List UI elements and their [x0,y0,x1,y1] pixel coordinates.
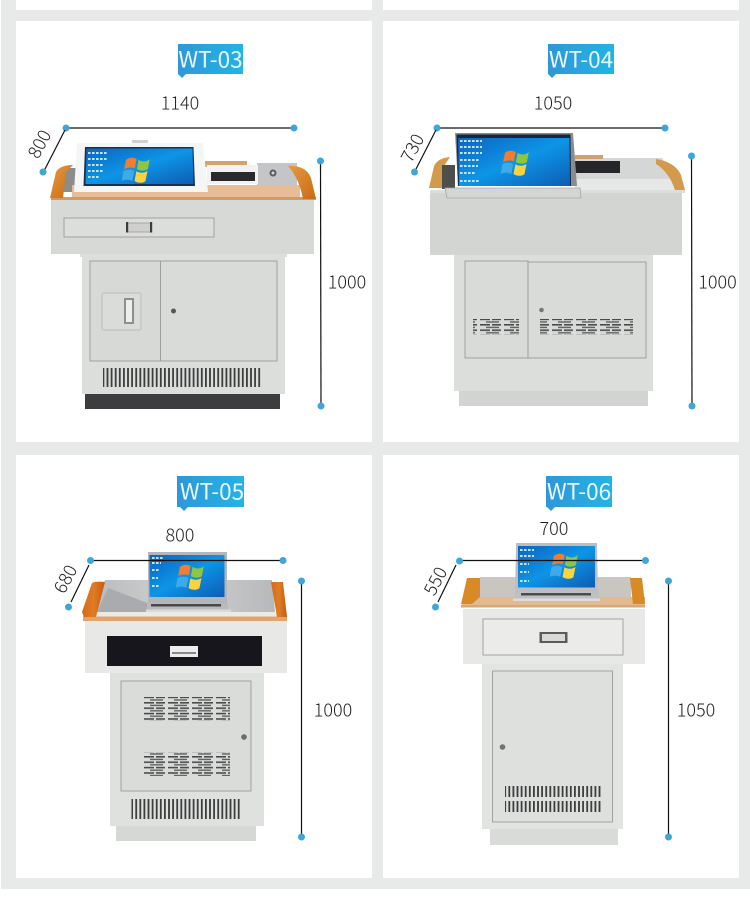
base plinth [85,394,280,409]
dimension: height 1000: 1000 [314,696,352,722]
wooden side rails [461,578,645,604]
dimension: depth 800 [21,125,65,176]
lower cabinet [110,673,264,826]
dimension: width line [87,557,286,564]
desktop surface [575,155,681,190]
badge: WT-05: WT-05 [180,474,244,506]
wooden side rails [429,157,685,190]
base plinth [459,391,648,406]
tray [445,188,581,198]
dimension: height 1050: 1050 [677,696,715,722]
podium WT-03 [50,140,316,409]
podium WT-04 [429,133,685,406]
lower cabinet [80,254,287,394]
dimension: depth 730: 730 [394,129,430,167]
dimension: width 1140 [62,90,298,132]
vents [132,697,240,819]
wooden side rails [50,165,316,199]
dimension: width 1050: 1050 [534,90,572,116]
dimension: height 1000 [298,578,352,840]
vent [103,368,262,387]
badge: WT-04: WT-04 [549,42,613,74]
dimension: height 1000 [688,152,737,410]
lock [539,308,544,312]
dimension: height 1000: 1000 [698,268,737,294]
lower cabinet [482,664,623,829]
upper body [430,190,685,255]
upper body [85,621,287,673]
podium WT-06 [461,543,645,845]
dimension: depth 550: 550 [417,562,453,600]
panel: WT-03 [16,21,372,442]
dimension: width 1140: 1140 [161,90,199,116]
upper body [463,609,645,664]
desktop surface [83,580,287,621]
badge: WT-03: WT-03 [178,42,243,74]
dimension: height 1000: 1000 [328,268,366,294]
laptop [146,552,231,612]
lower cabinet [454,255,653,391]
touch monitor [74,140,208,192]
podium WT-05 [82,552,287,841]
lock [241,734,247,740]
panel: WT-06 [383,455,739,878]
AV panel [575,161,620,173]
vents [473,319,633,335]
dimension: width 800: 800 [166,522,194,548]
wooden side rails [82,582,287,617]
desktop surface [461,577,645,608]
laptop [513,543,600,601]
dimension: depth 680: 680 [47,560,83,598]
base plinth [116,826,256,841]
dimension: depth 680 [47,560,89,610]
badge: WT-06: WT-06 [547,474,611,506]
top panel remnants [16,0,739,10]
desktop surface [51,161,316,200]
lock [500,744,505,750]
panel: WT-05 [16,455,372,878]
dimension: width line [456,557,649,564]
dimension: width 1050 [434,90,668,132]
dimension: depth 730 [394,129,436,176]
control panel [207,165,276,184]
panel: WT-04 [383,21,739,442]
base plinth [490,829,618,845]
door handle [102,293,141,330]
vents [505,786,602,812]
pop-up monitor [455,133,577,186]
upper body [51,200,314,254]
dimension: depth 800: 800 [21,125,57,163]
dimension: height 1050 [665,578,715,840]
dimension: height 1000 [317,158,366,410]
dimension: width 700: 700 [540,515,568,541]
lock [171,308,176,314]
